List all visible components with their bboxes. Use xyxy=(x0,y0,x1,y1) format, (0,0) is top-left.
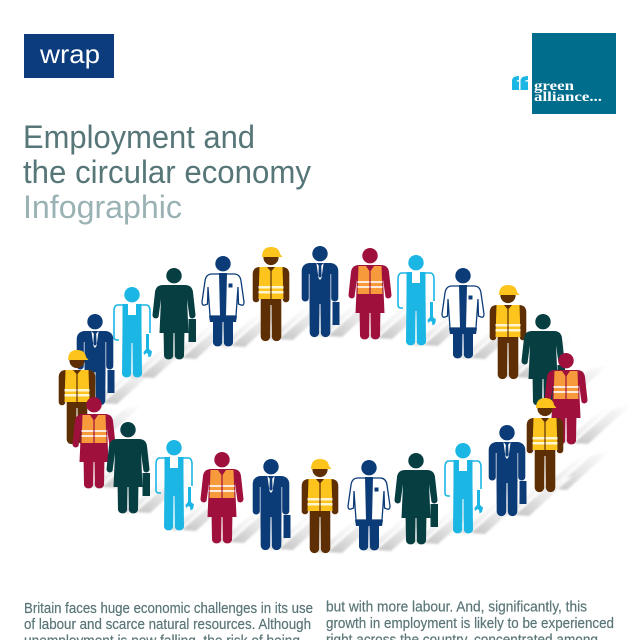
figure: doctor bottom xyxy=(348,460,390,550)
figure: woman lower left xyxy=(106,422,150,513)
figure: mechanic left xyxy=(114,287,152,377)
figure: worker xyxy=(253,247,289,341)
text block: right column xyxy=(326,600,614,640)
figure: suit left xyxy=(77,314,114,405)
logo: WRAP: wrap xyxy=(39,39,100,69)
figure: suit xyxy=(302,246,340,337)
text block: right column: but with more labour. And, significantly, this xyxy=(326,600,587,616)
figure: doctor xyxy=(202,256,244,346)
title xyxy=(23,119,311,225)
figure: mechanic xyxy=(398,255,436,345)
title: the circular economy xyxy=(23,154,311,190)
subtitle: Infographic xyxy=(23,189,182,225)
figure: woman in vest lower left xyxy=(72,397,116,488)
figure: worker right xyxy=(490,285,526,379)
figure: woman in vest bottom xyxy=(200,452,244,543)
figure: woman in vest xyxy=(348,248,392,339)
text block: left column: Britain faces huge economic challenges in its use xyxy=(24,601,313,617)
figure shadows xyxy=(73,297,632,553)
text block: left column xyxy=(24,601,313,640)
figure: mechanic lower left xyxy=(156,440,194,530)
figure: worker lower right xyxy=(527,398,563,492)
logo: green alliance xyxy=(512,33,616,114)
figure: suit lower right xyxy=(489,425,526,516)
text block: left column: of labour and scarce natural resources. Although xyxy=(24,617,311,633)
figure: mechanic lower right xyxy=(445,443,483,533)
logo: green alliance: green xyxy=(534,79,574,94)
logo: green alliance: alliance... xyxy=(534,90,602,105)
figure: woman in vest far right xyxy=(544,353,588,444)
figure: woman right xyxy=(521,314,565,405)
figure: worker bottom xyxy=(302,459,338,553)
figure: doctor right xyxy=(442,268,484,358)
figure: suit bottom xyxy=(253,459,290,550)
text block: right column: growth in employment is likely to be experienced xyxy=(326,616,614,632)
ring of workers xyxy=(59,246,632,553)
figure: woman left xyxy=(152,268,196,359)
figure: woman bottom xyxy=(394,453,438,544)
logo: WRAP xyxy=(24,34,114,78)
title: Employment and xyxy=(23,119,255,155)
figure: worker far left xyxy=(59,350,95,444)
